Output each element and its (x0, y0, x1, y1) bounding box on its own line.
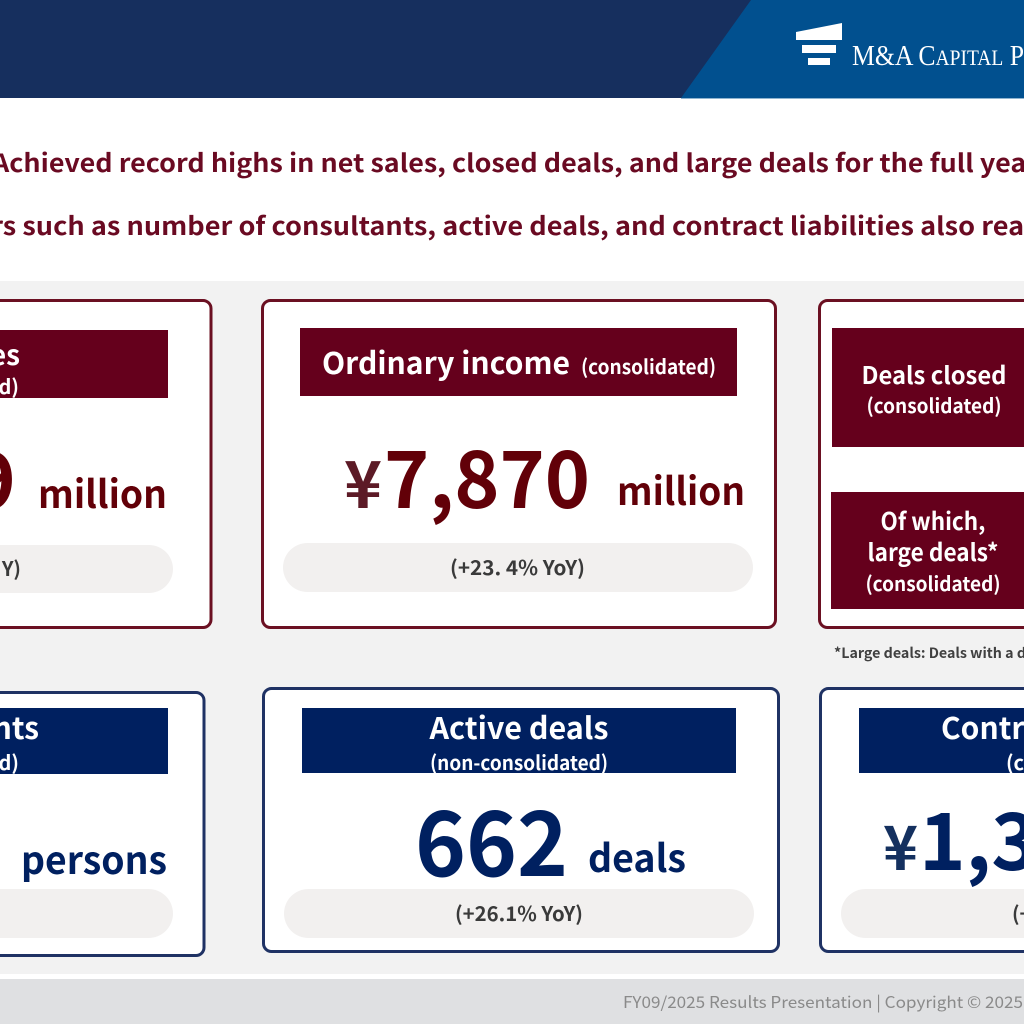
panel: deals closed (820, 300, 1024, 628)
active deals header: Active deals (428, 704, 608, 748)
footer band (0, 979, 1024, 1024)
panel: active deals (264, 688, 778, 952)
logo: M&A Capital Partners: M&A CAPITAL P (852, 40, 1024, 72)
active deals header: (non-consolidated) (430, 747, 608, 776)
footer band: FY09/2025 Results Presentation | Copyright © 2025 (623, 989, 1023, 1013)
panel: contract liabilities (820, 688, 1024, 952)
net sales yoy pill (0, 545, 173, 593)
contract liabilities value: ¥ (883, 799, 918, 888)
ordinary income yoy pill (283, 543, 753, 592)
active deals value: 662 (415, 772, 568, 902)
deals closed header: (consolidated) (866, 390, 1002, 419)
consultants yoy pill (0, 889, 173, 938)
active deals header (302, 704, 736, 776)
deals closed header (832, 328, 1024, 447)
footnote: *Large deals: Deals with a d (834, 643, 1024, 663)
panel: ordinary income (262, 300, 776, 628)
ordinary income value (344, 416, 745, 531)
logo: M&A Capital Partners (796, 23, 1024, 72)
content background (0, 281, 1024, 974)
ordinary income header: Ordinary income (322, 339, 570, 383)
large deals header (831, 492, 1024, 609)
net sales value (0, 417, 167, 532)
net sales value: million (38, 464, 167, 519)
headline messages (0, 144, 1024, 243)
deals closed header: Deals closed (862, 356, 1006, 391)
active deals value: deals (588, 828, 686, 883)
large deals header: large deals* (868, 533, 998, 568)
ordinary income value: million (617, 461, 745, 516)
contract liabilities yoy pill (841, 889, 1024, 938)
headline messages: Achieved record highs in net sales, closed deals, and large deals for the full year (0, 144, 1024, 180)
ordinary income header: (consolidated) (581, 351, 716, 380)
ordinary income value: ¥ (344, 433, 382, 527)
large deals header: Of which, (880, 502, 986, 537)
net sales yoy pill: Y) (1, 553, 21, 582)
active deals yoy pill (284, 889, 754, 938)
active deals value (415, 772, 686, 902)
consultants header (0, 704, 168, 776)
panel: net sales (0, 300, 211, 628)
active deals yoy pill: (+26.1% YoY) (455, 898, 583, 927)
large deals header: (consolidated) (866, 568, 1000, 597)
header band (0, 0, 1024, 99)
contract liabilities header (859, 704, 1024, 776)
consultants value: persons (21, 830, 167, 885)
ordinary income header (300, 328, 737, 396)
net sales header (0, 330, 168, 400)
ordinary income yoy pill: (+23. 4% YoY) (450, 552, 585, 581)
panel: consultants (0, 692, 204, 956)
ordinary income value: 7,870 (384, 416, 590, 531)
